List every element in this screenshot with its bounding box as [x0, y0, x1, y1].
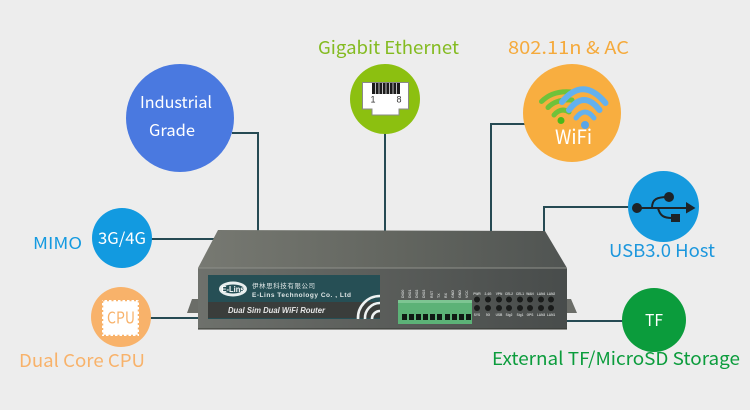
label: Dual Core CPU: Dual Core CPU — [19, 347, 145, 373]
terminal labels: TX — [437, 293, 441, 298]
LED labels: 5G — [486, 313, 491, 317]
product name: Dual Sim Dual WiFi Router — [228, 306, 326, 315]
LED labels: USB — [496, 313, 503, 317]
router top surface — [198, 230, 567, 268]
LED labels: CEL1 — [516, 292, 524, 296]
wifi arcs decoration — [358, 296, 380, 319]
icon: USB — [628, 171, 699, 242]
LED labels: LAN4 — [537, 292, 545, 296]
LED labels: VPN — [496, 292, 503, 296]
label: MIMO: MIMO — [33, 230, 82, 254]
LED labels: LAN2 — [547, 292, 555, 296]
circle: Industrial Grade — [126, 64, 234, 172]
terminal labels: GND — [451, 290, 455, 298]
LED labels — [473, 292, 555, 317]
label: USB3.0 Host: USB3.0 Host — [609, 237, 715, 263]
LED labels: 2.4G — [485, 292, 492, 296]
terminal labels: RX — [444, 292, 448, 298]
LED labels: Sig2 — [506, 313, 513, 317]
LED labels: PWR — [473, 292, 481, 296]
icon: ethernet port: 1 — [370, 94, 376, 104]
LED labels: LAN1 — [547, 313, 555, 317]
green wifi signal — [542, 92, 572, 124]
LED labels: CEL2 — [505, 292, 513, 296]
terminal labels: DIO1 — [408, 290, 412, 298]
label: External TF/MicroSD Storage: External TF/MicroSD Storage — [492, 345, 740, 371]
circle: 3G/4G — [92, 208, 152, 268]
company name english: E-Lins Technology Co. , Ltd — [252, 292, 351, 299]
router front face — [198, 268, 567, 329]
router device — [187, 230, 577, 329]
icon: WiFi: WiFi — [555, 121, 592, 150]
circle: TF — [622, 288, 686, 352]
company name: 伊林思科技有限公司 — [252, 281, 315, 290]
LED labels: Sig1 — [517, 313, 524, 317]
circle: TF: TF — [645, 307, 663, 331]
circle: Industrial Grade: Grade — [149, 117, 195, 141]
terminal labels: VCC — [465, 290, 469, 298]
connector lines — [148, 124, 630, 321]
LED labels: GPS — [527, 313, 533, 317]
logo: E-Lins — [222, 285, 245, 294]
icon: WiFi — [523, 64, 621, 162]
icon: ethernet port: 8 — [396, 94, 402, 104]
heading: 802.11n & AC: 802.11n & AC — [508, 34, 629, 60]
terminal labels — [401, 290, 469, 298]
green terminal block — [398, 300, 472, 324]
indicator LEDs — [474, 296, 554, 311]
circle: 3G/4G: 3G/4G — [98, 225, 146, 249]
terminal labels: DIO3 — [422, 290, 426, 298]
terminal labels: RST — [430, 290, 434, 298]
icon: CPU: CPU — [107, 304, 135, 328]
terminal labels: GND — [458, 290, 462, 298]
brand label panel — [208, 275, 380, 319]
LED labels: SYS — [474, 313, 480, 317]
icon: ethernet port — [350, 64, 420, 134]
logo — [219, 282, 247, 296]
LED labels: LAN3 — [537, 313, 545, 317]
terminal labels: DIO0 — [401, 290, 405, 298]
icon: CPU — [91, 287, 151, 347]
blue wifi signal — [562, 89, 606, 129]
mounting ears — [187, 299, 577, 313]
heading: Gigabit Ethernet: Gigabit Ethernet — [318, 34, 459, 60]
LED labels: WAN — [526, 292, 534, 296]
circle: Industrial Grade: Industrial — [140, 89, 212, 113]
terminal labels: DIO2 — [415, 290, 419, 298]
